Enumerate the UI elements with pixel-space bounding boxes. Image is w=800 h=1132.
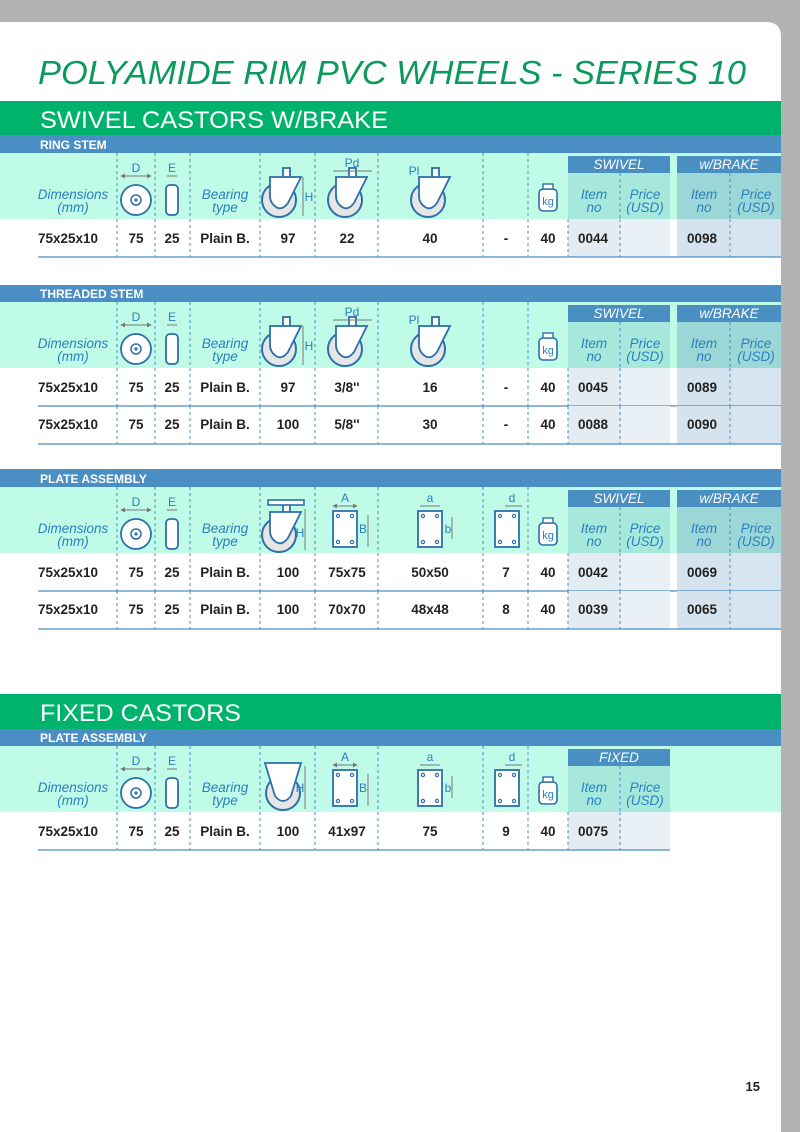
panel: fixed plate assembly: 100 [277,824,299,839]
panel: threaded stem: THREADED STEM [40,287,143,301]
panel: ring stem: 0044 [578,231,609,246]
section bar: swivel castors w/brake [0,101,781,135]
panel: fixed plate assembly: FIXED [599,750,639,765]
panel: plate assembly swivel: 100 [277,565,299,580]
panel: threaded stem: 5/8'' [334,417,360,432]
panel: threaded stem: 30 [422,417,438,432]
panel: fixed plate assembly: 40 [540,824,556,839]
panel: threaded stem: 0045 [578,380,609,395]
panel: plate assembly swivel: H [296,526,304,540]
panel: ring stem: 75x25x10 [38,231,98,246]
panel: plate assembly swivel: 75 [128,565,144,580]
panel: threaded stem: 3/8'' [334,380,360,395]
panel: plate assembly swivel: 100 [277,602,299,617]
panel: plate assembly swivel: 75x25x10 [38,565,98,580]
panel: fixed plate assembly: 75 [128,824,144,839]
panel: threaded stem: 75 [128,417,144,432]
panel: fixed plate assembly: H [296,781,304,795]
panel: plate assembly swivel: 25 [164,565,180,580]
section bar: fixed castors: FIXED CASTORS [40,700,241,727]
panel: fixed plate assembly: no [586,793,602,808]
panel: threaded stem: 100 [277,417,299,432]
panel: ring stem: 97 [280,231,296,246]
panel: plate assembly swivel: 0039 [578,602,608,617]
panel: plate assembly swivel: 40 [540,602,556,617]
panel: fixed plate assembly: 0075 [578,824,609,839]
panel: ring stem: 22 [339,231,355,246]
panel: ring stem: 25 [164,231,180,246]
panel: threaded stem: Plain B. [200,380,250,395]
panel: threaded stem: 75x25x10 [38,380,98,395]
panel: threaded stem: 40 [540,380,556,395]
panel: fixed plate assembly: PLATE ASSEMBLY [40,731,147,745]
panel: fixed plate assembly: 25 [164,824,180,839]
panel: plate assembly swivel: 7 [502,565,510,580]
panel: plate assembly swivel: 0042 [578,565,608,580]
panel: threaded stem: 0089 [687,380,717,395]
panel: ring stem: 40 [540,231,556,246]
panel: threaded stem: 75 [128,380,144,395]
panel: ring stem: 75 [128,231,144,246]
panel: ring stem: RING STEM [40,138,107,152]
panel: fixed plate assembly: (USD) [626,793,664,808]
panel: threaded stem: 25 [164,380,180,395]
panel: plate assembly swivel: Plain B. [200,602,250,617]
panel: plate assembly swivel: 0069 [687,565,717,580]
section bar: swivel castors w/brake: SWIVEL CASTORS W/BRAKE [40,107,388,134]
panel: threaded stem: - [504,417,508,432]
title: POLYAMIDE RIM PVC WHEELS - SERIES 10 [38,54,747,91]
panel: threaded stem: 0088 [578,417,609,432]
panel: fixed plate assembly [0,729,781,850]
panel: threaded stem: 25 [164,417,180,432]
panel: plate assembly swivel [0,469,781,629]
panel: fixed plate assembly: Plain B. [200,824,250,839]
panel: plate assembly swivel: 40 [540,565,556,580]
panel: plate assembly swivel: 50x50 [411,565,449,580]
page number: 15 [746,1079,760,1094]
panel: ring stem: 40 [422,231,438,246]
panel: plate assembly swivel: 70x70 [328,602,366,617]
panel: threaded stem: 16 [422,380,438,395]
panel: plate assembly swivel: 75 [128,602,144,617]
panel: plate assembly swivel: 75x75 [328,565,366,580]
panel: fixed plate assembly: 41x97 [328,824,366,839]
panel: ring stem [0,135,781,257]
panel: threaded stem: Plain B. [200,417,250,432]
panel: fixed plate assembly: Item [581,780,607,795]
panel: threaded stem: 0090 [687,417,717,432]
panel: threaded stem: 97 [280,380,296,395]
panel: threaded stem: 40 [540,417,556,432]
section bar: fixed castors [0,694,781,729]
panel: plate assembly swivel: PLATE ASSEMBLY [40,472,147,486]
panel: fixed plate assembly: 75 [422,824,438,839]
panel: plate assembly swivel: 0065 [687,602,718,617]
panel: plate assembly swivel: Plain B. [200,565,250,580]
panel: threaded stem: - [504,380,508,395]
panel: threaded stem [0,285,781,444]
panel: plate assembly swivel: 25 [164,602,180,617]
panel: ring stem: - [504,231,508,246]
panel: fixed plate assembly: Price [630,780,660,795]
panel: plate assembly swivel: 75x25x10 [38,602,98,617]
panel: fixed plate assembly: 75x25x10 [38,824,98,839]
panel: fixed plate assembly: 9 [502,824,510,839]
panel: plate assembly swivel: 8 [502,602,510,617]
panel: threaded stem: 75x25x10 [38,417,98,432]
panel: plate assembly swivel: 48x48 [411,602,449,617]
panel: ring stem: 0098 [687,231,718,246]
panel: ring stem: Plain B. [200,231,250,246]
